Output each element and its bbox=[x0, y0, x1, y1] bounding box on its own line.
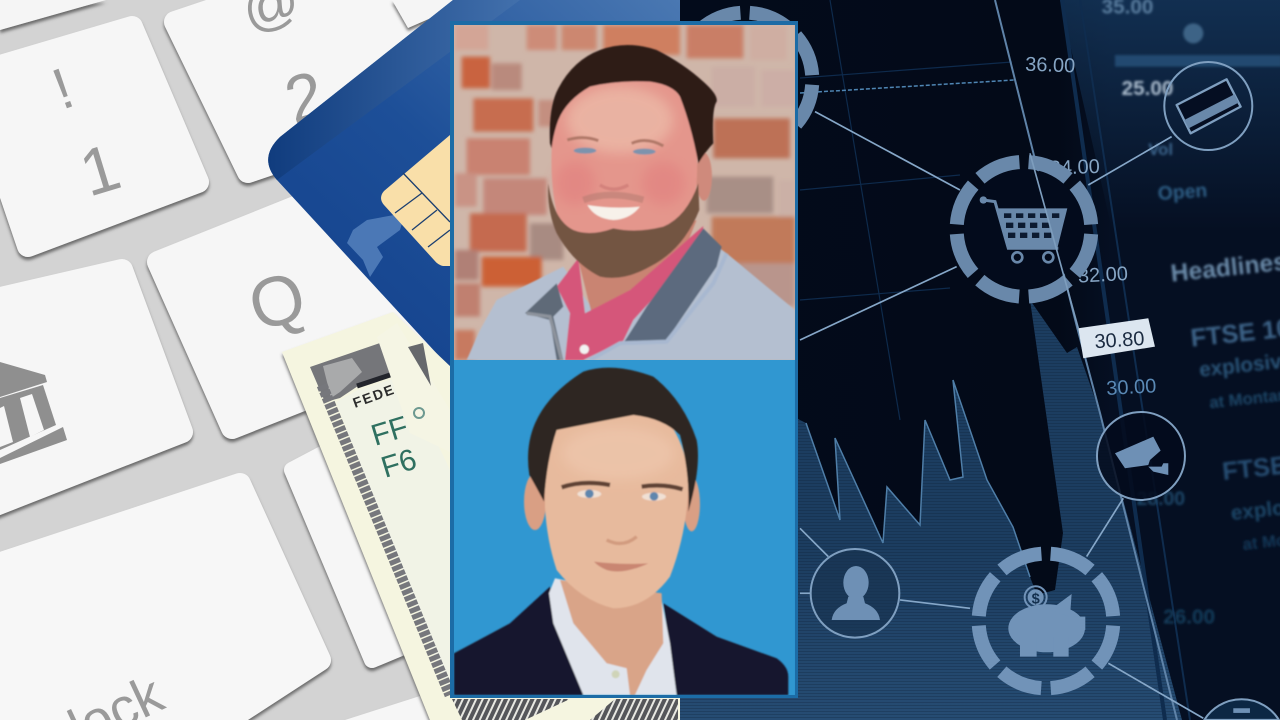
shirt bbox=[549, 578, 677, 695]
key: Q: Q bbox=[240, 256, 314, 346]
dollar bills: FF bbox=[367, 410, 412, 453]
dollar bills bbox=[282, 312, 680, 720]
dollar bills: F6 bbox=[377, 443, 421, 485]
icon: bank bbox=[0, 362, 67, 464]
dollar bills: FEDE bbox=[351, 381, 397, 411]
icon ring: top left bbox=[700, 6, 820, 129]
key: exclamation 1: ! bbox=[44, 56, 82, 122]
label box 30.80 bbox=[1078, 318, 1155, 358]
key: at sign 2 bbox=[175, 0, 460, 172]
icon ring: piggy bank: $ bbox=[1032, 591, 1040, 607]
eyes bbox=[567, 138, 663, 155]
label 32.00: 32.00 bbox=[1077, 263, 1129, 288]
sweater bbox=[467, 237, 795, 360]
area chart bbox=[680, 300, 1182, 720]
icon circle: bottom right bbox=[1204, 699, 1279, 720]
key: exclamation 1 bbox=[0, 27, 198, 246]
hair bbox=[528, 368, 698, 512]
jacket bbox=[454, 587, 788, 695]
blurred side text: Vol bbox=[1148, 140, 1173, 159]
map shape on card bbox=[347, 213, 405, 277]
chart outline bbox=[806, 380, 1030, 577]
shirt bbox=[557, 226, 703, 360]
blurred side text bbox=[1102, 0, 1280, 628]
grid lines bbox=[800, 0, 1190, 720]
icon circle: person bbox=[811, 549, 899, 638]
dashed price line bbox=[800, 80, 1014, 93]
key: narrow bbox=[292, 450, 420, 660]
key: exclamation 1: 1 bbox=[71, 129, 128, 210]
axis line bbox=[995, 0, 1177, 720]
collar bbox=[623, 228, 722, 343]
blurred side text: Open bbox=[1157, 181, 1208, 205]
ears bbox=[524, 473, 546, 530]
key: top partial bbox=[392, 0, 470, 28]
blurred side text: 25.00 bbox=[1122, 77, 1173, 100]
icon circle: security camera bbox=[1097, 412, 1185, 500]
key: at sign 2: 2 bbox=[276, 56, 333, 137]
key: top-left partial bbox=[0, 0, 106, 30]
icon ring: piggy bank bbox=[979, 554, 1113, 688]
smile bbox=[587, 205, 640, 220]
label box 30.80: 30.80 bbox=[1094, 328, 1145, 353]
icon circle: credit card bbox=[1164, 62, 1252, 150]
hair bbox=[550, 45, 717, 163]
icon ring: shopping cart bbox=[957, 153, 1091, 328]
person bbox=[454, 368, 788, 695]
icon: piggy bbox=[1008, 586, 1085, 657]
label 30.00: 30.00 bbox=[1106, 375, 1157, 400]
eyebrows bbox=[562, 483, 683, 489]
face bbox=[551, 74, 697, 273]
neck bbox=[560, 580, 663, 695]
ear bbox=[696, 153, 712, 201]
photo: man with beard against brick wall bbox=[454, 25, 795, 360]
blurred side text: 26.00 bbox=[1163, 605, 1215, 628]
panel: dark trading chart background bbox=[678, 0, 1280, 720]
nose bbox=[600, 185, 628, 189]
person bbox=[467, 45, 795, 360]
portrait frame bbox=[452, 23, 796, 696]
credit card bbox=[268, 0, 680, 368]
connector lines bbox=[800, 112, 1203, 718]
chart labels and icons bbox=[678, 0, 1280, 720]
key: bottom partial bbox=[346, 696, 430, 720]
icon: cart bbox=[980, 196, 1067, 262]
nose bbox=[607, 537, 637, 543]
photo: man in dark jacket on blue bbox=[454, 360, 795, 695]
eyes bbox=[577, 489, 666, 501]
key: Q bbox=[145, 196, 434, 444]
mouth bbox=[594, 562, 648, 571]
icon: card chip bbox=[381, 135, 450, 266]
brick wall bbox=[455, 25, 795, 360]
beard bbox=[548, 183, 699, 278]
label 34.00: 34.00 bbox=[1049, 156, 1100, 180]
key: lock bbox=[0, 484, 320, 720]
neck bbox=[578, 220, 697, 320]
face bbox=[545, 397, 688, 608]
panel: keyboard background bbox=[0, 0, 680, 720]
label 36.00: 36.00 bbox=[1025, 54, 1076, 77]
blurred side text: 28.00 bbox=[1137, 489, 1185, 510]
key: bank bbox=[0, 270, 182, 515]
